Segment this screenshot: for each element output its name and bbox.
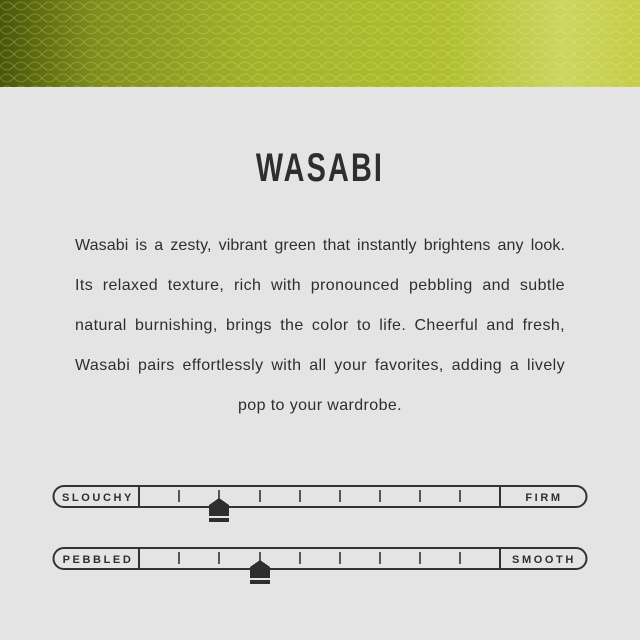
labels: FIRM: [525, 492, 563, 504]
labels: [62, 492, 576, 566]
labels: PEBBLED: [63, 554, 133, 566]
description text: natural burnishing, brings the color to life. Cheerful and fresh,: [75, 317, 565, 334]
marker: pebbled: [250, 560, 270, 584]
labels: SLOUCHY: [62, 492, 134, 504]
title: WASABI: [256, 146, 384, 190]
marker: slouchy: [209, 498, 229, 522]
slider: slouchy-firm: [54, 486, 586, 569]
description text: Its relaxed texture, rich with pronounced pebbling and subtle: [75, 277, 565, 294]
description text: [75, 237, 565, 414]
description text: Wasabi is a zesty, vibrant green that instantly brightens any look.: [75, 237, 565, 254]
labels: SMOOTH: [512, 554, 576, 566]
description text: Wasabi pairs effortlessly with all your favorites, adding a lively: [75, 357, 565, 374]
description text: pop to your wardrobe.: [238, 397, 402, 414]
header: leather texture: [0, 0, 640, 87]
